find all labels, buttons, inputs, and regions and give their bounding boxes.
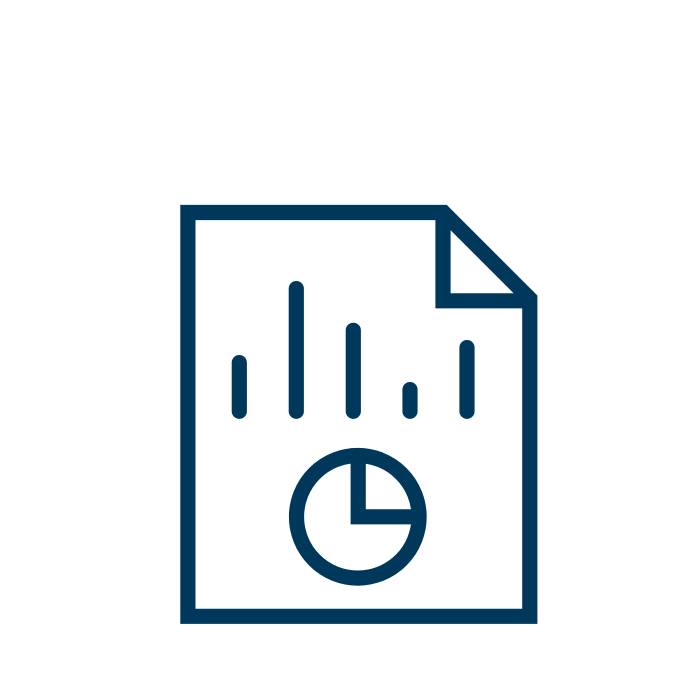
bar chart [239,289,467,411]
pie chart [296,456,419,578]
folded corner [443,212,530,301]
document outline [188,212,530,616]
